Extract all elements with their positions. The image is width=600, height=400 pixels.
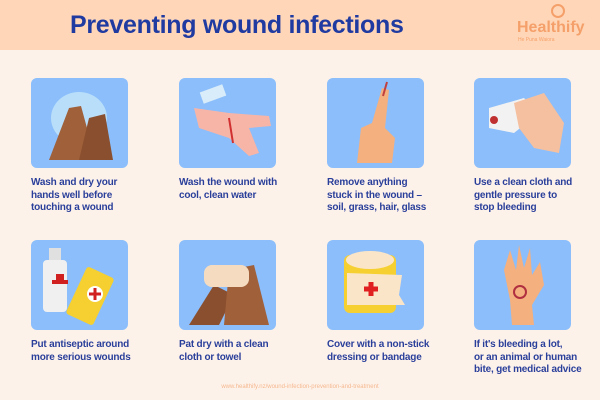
text: wash wound <box>179 177 277 201</box>
text: wash hands <box>31 177 118 213</box>
logo: Healthify <box>517 19 585 36</box>
panel: pat dry <box>179 240 276 330</box>
text: medical advice: If it's bleeding a lot, <box>474 339 562 350</box>
logo <box>517 4 585 43</box>
panel: wash hands <box>31 78 128 168</box>
text: remove debris: stuck in the wound – <box>327 190 422 201</box>
panel: antiseptic <box>31 240 128 330</box>
panel: medical advice <box>474 240 571 330</box>
text: medical advice: or an animal or human <box>474 352 577 363</box>
header band <box>0 0 600 50</box>
text: antiseptic: Put antiseptic around <box>31 339 129 350</box>
text: medical advice: bite, get medical advice <box>474 364 581 375</box>
panel: wash wound <box>179 78 276 168</box>
logo: He Puna Waiora <box>518 37 554 43</box>
text: remove debris: soil, grass, hair, glass <box>327 202 426 213</box>
text: antiseptic: more serious wounds <box>31 352 131 363</box>
text: wash wound: Wash the wound with <box>179 177 277 188</box>
text: dressing: Cover with a non-stick <box>327 339 429 350</box>
text: pat dry: Pat dry with a clean <box>179 339 268 350</box>
text: antiseptic <box>31 339 131 363</box>
panel: pressure <box>474 78 571 168</box>
text: pressure: stop bleeding <box>474 202 536 213</box>
text: wash hands: touching a wound <box>31 202 113 213</box>
text: remove debris <box>327 177 426 213</box>
title: Preventing wound infections <box>70 11 404 39</box>
text: wash hands: hands well before <box>31 190 112 201</box>
text: wash wound: cool, clean water <box>179 190 256 201</box>
text: pressure: Use a clean cloth and <box>474 177 572 188</box>
footer url: www.healthify.nz/wound-infection-prevention-and-treatment <box>221 384 379 390</box>
text: remove debris: Remove anything <box>327 177 407 188</box>
text: pat dry: cloth or towel <box>179 352 241 363</box>
panel: remove debris <box>327 78 424 168</box>
panel: dressing <box>327 240 424 330</box>
text: dressing: dressing or bandage <box>327 352 422 363</box>
text: medical advice <box>474 339 582 375</box>
text: pressure <box>474 177 572 213</box>
text: pressure: gentle pressure to <box>474 190 557 201</box>
text: wash hands: Wash and dry your <box>31 177 117 188</box>
text: dressing <box>327 339 430 363</box>
text: pat dry <box>179 339 268 363</box>
